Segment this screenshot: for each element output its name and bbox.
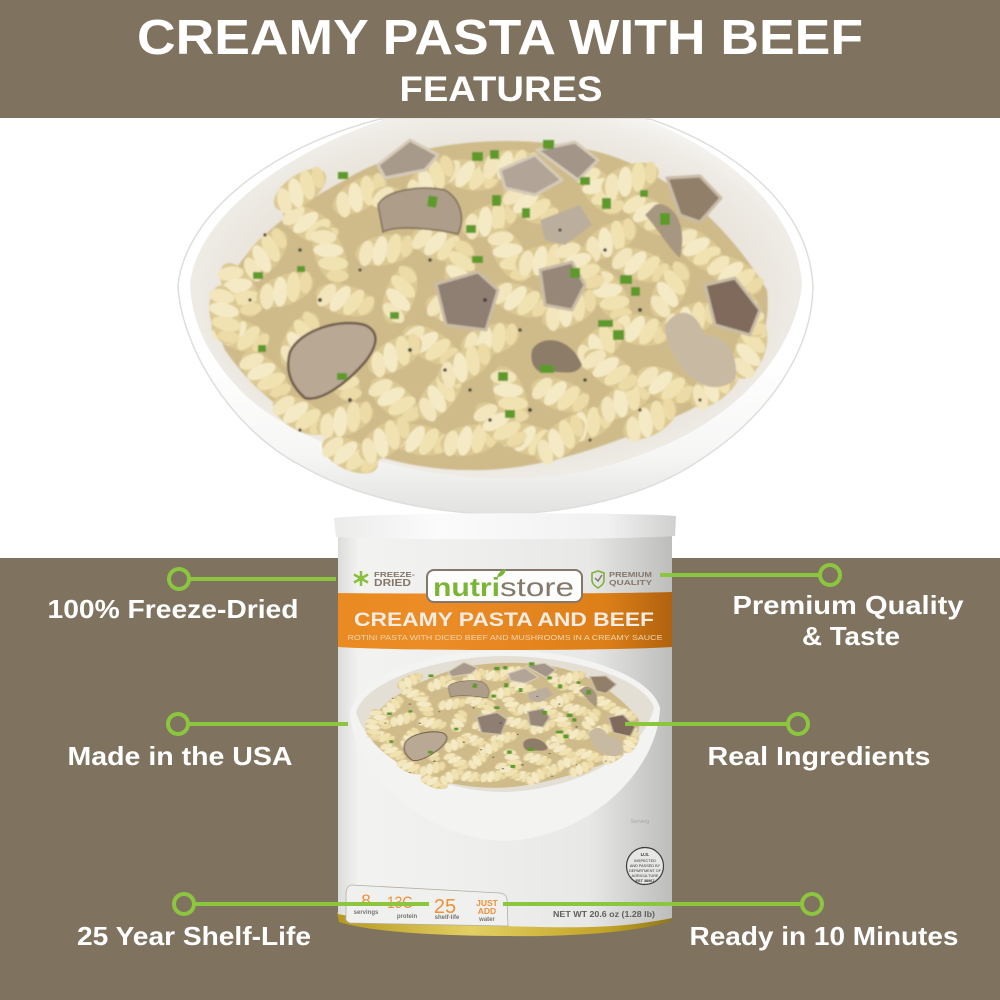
net weight: NET WT 20.6 oz (1.28 lb) (553, 910, 655, 919)
callout: ready in 10 minutes: Ready in 10 Minutes (690, 921, 958, 951)
callout: real ingredients: Real Ingredients (708, 741, 930, 771)
can stats box (346, 885, 508, 926)
USDA inspection seal (626, 848, 664, 884)
small bowl on label (350, 650, 660, 841)
premium quality badge: QUALITY (609, 578, 652, 587)
USDA inspection seal: EST 38967 (636, 879, 654, 883)
can stats box: 8 (361, 891, 371, 910)
freeze-dried badge: FREEZE- (374, 570, 416, 579)
callout: premium quality and taste: Premium Quality (732, 590, 964, 620)
callout: ready in 10 minutes (503, 894, 958, 951)
orange label band: ROTINI PASTA WITH DICED BEEF AND MUSHROOMS IN A CREAMY SAUCE (348, 633, 662, 642)
can gold base (337, 912, 672, 936)
can stats box: water (478, 917, 495, 923)
can stats box: JUST (476, 898, 499, 908)
callout: real ingredients (625, 714, 930, 771)
nutristore logo (427, 569, 582, 602)
nutristore logo: nutri (433, 572, 500, 602)
lower panel background (0, 558, 1000, 1000)
callout: 100% freeze-dried: 100% Freeze-Dried (48, 594, 298, 624)
can stats box: 13G (387, 893, 413, 912)
can stats box: 25 (434, 896, 456, 918)
can lid (334, 513, 676, 539)
pasta food (203, 140, 776, 483)
orange label band: CREAMY PASTA AND BEEF (354, 610, 654, 631)
callout: 25 year shelf-life (77, 894, 429, 951)
USDA inspection seal: U.S. (641, 852, 649, 857)
title banner (0, 0, 1000, 118)
premium quality badge: PREMIUM (609, 570, 652, 579)
USDA inspection seal: INSPECTED (634, 859, 656, 863)
can stats box: shelf-life (435, 915, 460, 921)
callout: premium quality and taste (660, 565, 964, 651)
freeze-dried badge: DRIED (374, 578, 411, 589)
USDA inspection seal: AND PASSED BY (630, 864, 661, 868)
subheading: features: FEATURES (400, 70, 602, 109)
heading: product name: CREAMY PASTA WITH BEEF (137, 11, 863, 65)
callout: premium quality and taste: & Taste (802, 621, 900, 651)
premium quality badge (592, 570, 652, 588)
orange label band (338, 592, 672, 650)
serving suggestion note: Serving (631, 819, 649, 825)
callout: made in the USA (68, 714, 348, 771)
bowl of pasta photo (178, 119, 813, 514)
can stats box: protein (397, 914, 417, 920)
USDA inspection seal: DEPARTMENT OF (629, 869, 662, 873)
can stats box: ADD (478, 906, 496, 916)
nutristore logo: store (500, 572, 574, 602)
can stats box: servings (354, 910, 379, 916)
freeze-dried badge (354, 570, 416, 589)
callout: 25 year shelf-life: 25 Year Shelf-Life (77, 921, 311, 951)
callout: made in the USA: Made in the USA (68, 741, 293, 771)
product can (334, 513, 676, 936)
callout: 100% freeze-dried (48, 569, 336, 624)
can body (338, 536, 672, 927)
USDA inspection seal: AGRICULTURE (632, 874, 659, 878)
